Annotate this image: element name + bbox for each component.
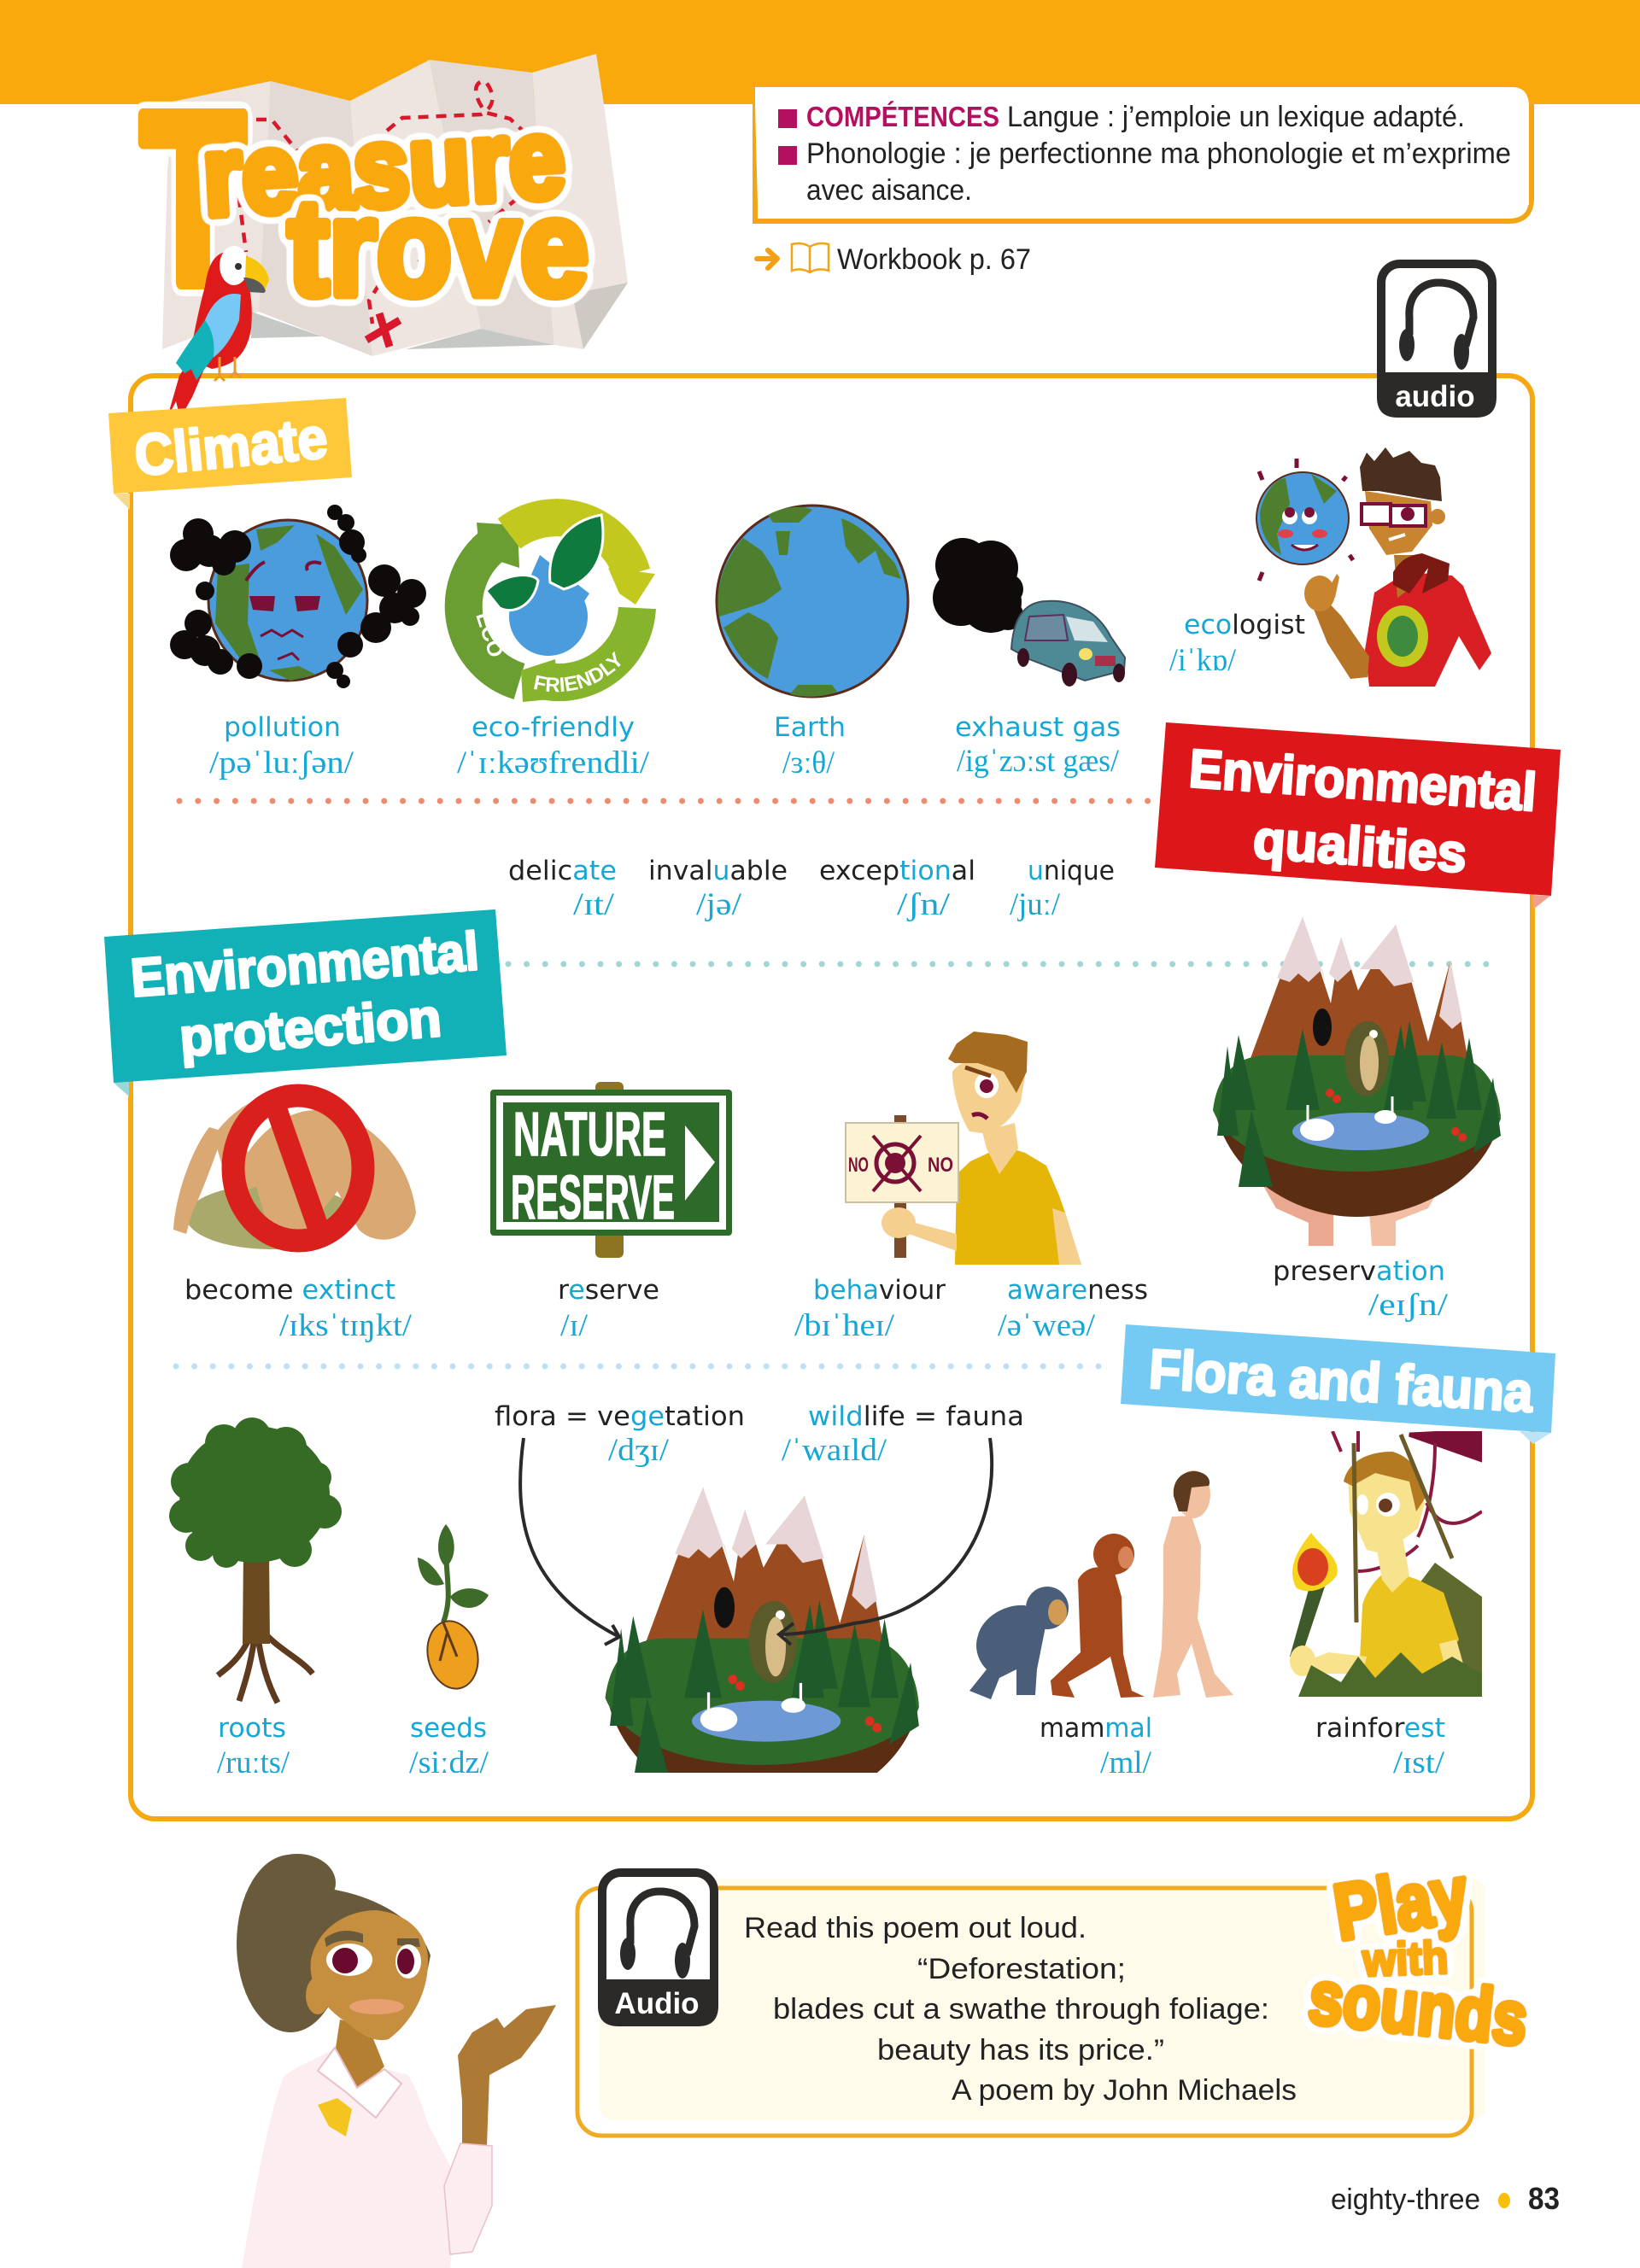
word list: environmental qualities — [508, 856, 1115, 922]
word list: environmental qualities: exceptional — [819, 856, 975, 886]
competences box: COMPÉTENCES — [806, 101, 999, 132]
parrot — [167, 246, 269, 420]
treasure map — [162, 54, 628, 356]
heading: Play with sounds: with — [1361, 1932, 1449, 1986]
illustration: protester with sign: NO — [928, 1154, 953, 1177]
label: preservation: /eɪʃn/ — [1368, 1288, 1449, 1323]
illustration: boy in rainforest with torch — [1290, 1431, 1482, 1697]
icon: polluted Earth — [170, 505, 426, 688]
illustration: girl presenting — [237, 1854, 556, 2268]
competences box: Langue : j’emploie un lexique adapté. — [1007, 101, 1465, 133]
label: pollution: /pəˈluːʃən/ — [209, 745, 354, 780]
label: roots: roots — [218, 1713, 286, 1744]
label: reserve: reserve — [558, 1275, 659, 1306]
illustration: nature reserve sign: RESERVE — [511, 1164, 675, 1232]
heading: Play with sounds: sounds — [1305, 1954, 1532, 2061]
poem text: A poem by John Michaels — [952, 2074, 1297, 2107]
poem text — [744, 1912, 1297, 2107]
main vocabulary panel — [131, 376, 1532, 1819]
word list: environmental qualities: /juː/ — [1010, 887, 1061, 922]
label: awareness: /əˈweə/ — [998, 1308, 1096, 1343]
label: become extinct — [184, 1275, 413, 1343]
audio badge on poem box: Audio — [614, 1987, 700, 2020]
label: eco-friendly — [457, 712, 650, 780]
label: seeds: /siːdz/ — [409, 1745, 489, 1780]
illustration: island held in hands — [1213, 917, 1501, 1246]
word list: environmental qualities: /ɪt/ — [573, 887, 615, 922]
label: wildlife = fauna: wildlife = fauna — [808, 1401, 1024, 1432]
workbook reference with arrow and book icon — [757, 243, 1031, 276]
label: awareness: awareness — [1007, 1275, 1148, 1306]
page number footer: 83 — [1528, 2181, 1560, 2216]
heading: Climate — [108, 398, 352, 510]
competences box — [755, 87, 1532, 221]
poem text: blades cut a swathe through foliage: — [773, 1993, 1269, 2025]
smoke clouds — [170, 505, 426, 688]
poem text: “Deforestation; — [917, 1953, 1126, 1985]
arrow: flora to trees — [520, 1438, 619, 1645]
illustration: nature reserve sign: NATURE — [513, 1101, 666, 1169]
illustration: protester with sign: NO — [848, 1154, 869, 1177]
illustration: protester with sign — [846, 1032, 1081, 1265]
label: wildlife = fauna — [782, 1401, 1024, 1468]
label: reserve: /ɪ/ — [560, 1308, 589, 1343]
label: roots: /ruːts/ — [217, 1745, 290, 1780]
label: preservation — [1273, 1256, 1449, 1323]
title: Treasure trove: reasure — [200, 95, 568, 239]
heading: Flora and fauna — [1121, 1324, 1555, 1444]
icon: car with exhaust smoke — [933, 538, 1125, 687]
label: rainforest: /ɪst/ — [1393, 1745, 1445, 1780]
arrow: fauna to bear — [779, 1438, 992, 1645]
label: awareness — [998, 1275, 1148, 1343]
icon: headphones — [1399, 283, 1473, 370]
title: Treasure trove: T — [141, 63, 245, 335]
label: Earth: /ɜːθ/ — [782, 745, 835, 780]
label: ecologist: /iˈkɒ/ — [1169, 643, 1237, 678]
icon: eco-friendly recycling logo: FRIENDLY — [534, 651, 621, 692]
label: eco-friendly: eco-friendly — [472, 712, 635, 743]
label: roots — [217, 1713, 290, 1780]
label: seeds — [409, 1713, 489, 1780]
label: become extinct: become extinct — [184, 1275, 395, 1306]
heading: Climate: Climate — [132, 406, 330, 488]
label: pollution — [209, 712, 354, 780]
poem text: Read this poem out loud. — [744, 1912, 1086, 1944]
label: ecologist — [1169, 610, 1305, 678]
word list: environmental qualities: unique — [1028, 856, 1115, 886]
word list: environmental qualities: /ʃn/ — [897, 887, 951, 922]
poem box — [577, 1879, 1485, 2136]
label: rainforest: rainforest — [1315, 1713, 1445, 1744]
label: exhaust gas — [955, 712, 1121, 779]
label: become extinct: /ɪksˈtɪŋkt/ — [279, 1308, 413, 1343]
illustration: anteater with prohibition sign — [173, 1093, 416, 1249]
heading: Play with sounds: Play — [1328, 1850, 1473, 1957]
label: flora = vegetation: flora = vegetation — [495, 1401, 745, 1432]
audio badge: audio — [1395, 380, 1475, 413]
label: preservation: preservation — [1273, 1256, 1445, 1287]
label: Earth — [774, 712, 846, 780]
label: eco-friendly: /ˈɪːkəʊfrendli/ — [457, 745, 650, 780]
icon: eco-friendly recycling logo — [444, 499, 656, 702]
label: behaviour: behaviour — [813, 1275, 946, 1306]
word list: environmental qualities: delicate — [508, 856, 617, 886]
label: Earth: Earth — [774, 712, 846, 743]
label: flora = vegetation — [495, 1401, 745, 1468]
illustration: nature reserve sign — [490, 1082, 732, 1258]
label: seeds: seeds — [410, 1713, 487, 1744]
heading: Environmental qualities: Environmental — [1187, 739, 1538, 822]
heading: Environmental protection: Environmental — [129, 921, 481, 1008]
heading: Environmental qualities — [1155, 722, 1561, 909]
audio badge on poem box — [598, 1873, 718, 2026]
label: mammal — [1040, 1713, 1152, 1780]
icon: headphones — [620, 1891, 694, 1979]
label: behaviour: /bɪˈheɪ/ — [794, 1308, 895, 1343]
heading: Environmental qualities: qualities — [1251, 810, 1468, 884]
icon: Earth — [717, 506, 908, 697]
label: flora = vegetation: /dʒɪ/ — [608, 1433, 670, 1468]
label: ecologist: ecologist — [1184, 610, 1305, 640]
label: behaviour — [794, 1275, 946, 1343]
top orange band — [0, 0, 1640, 104]
title: Treasure trove: trove — [288, 171, 589, 324]
label: rainforest — [1315, 1713, 1445, 1780]
illustration: evolution of mammals — [969, 1470, 1233, 1699]
label: mammal: mammal — [1040, 1713, 1152, 1744]
poem text: beauty has its price.” — [877, 2034, 1164, 2066]
illustration: seed with sprout — [418, 1524, 489, 1693]
page number footer — [1331, 2181, 1560, 2216]
page number footer: eighty-three — [1331, 2183, 1480, 2216]
competences box: Phonologie : je perfectionne ma phonologie et m’exprime — [806, 137, 1511, 170]
label: pollution: pollution — [224, 712, 341, 743]
audio badge — [1377, 264, 1496, 418]
illustration: ecologist with happy Earth — [1256, 447, 1491, 687]
competences box: avec aisance. — [806, 174, 972, 207]
icon: eco-friendly recycling logo: ECO — [471, 609, 508, 660]
label: exhaust gas: exhaust gas — [955, 712, 1121, 743]
label: reserve — [558, 1275, 659, 1343]
label: wildlife = fauna: /ˈwaɪld/ — [782, 1433, 887, 1468]
heading: Flora and fauna: Flora and fauna — [1147, 1337, 1536, 1423]
illustration: island, wildlife and vegetation — [605, 1488, 919, 1773]
label: mammal: /ml/ — [1100, 1745, 1152, 1780]
workbook reference with arrow and book icon: Workbook p. 67 — [837, 243, 1031, 276]
heading: Environmental protection: protection — [178, 988, 443, 1068]
word list: environmental qualities: /jə/ — [696, 887, 742, 922]
label: exhaust gas: /igˈzɔːst gæs/ — [957, 744, 1120, 779]
heading: Environmental protection — [104, 909, 507, 1096]
illustration: tree with roots — [169, 1418, 342, 1703]
word list: environmental qualities: invaluable — [648, 856, 788, 886]
heading: Play with sounds — [1305, 1850, 1532, 2061]
title: Treasure trove — [141, 63, 589, 335]
